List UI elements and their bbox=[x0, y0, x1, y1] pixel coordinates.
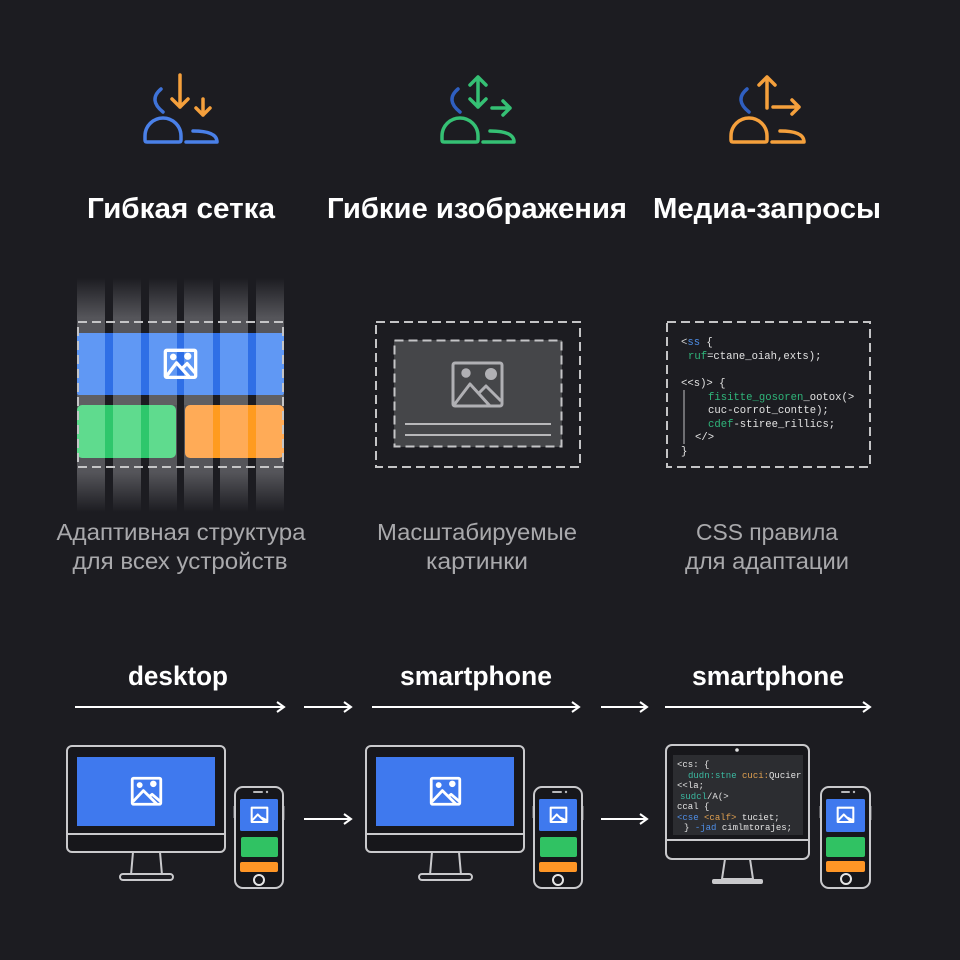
icon: image bbox=[165, 350, 196, 377]
panel: css code: cdef-stiree_rillics; bbox=[708, 419, 835, 431]
code: dudn:stne cuci:Qucier bbox=[688, 771, 801, 781]
icon: image bbox=[838, 808, 853, 822]
code: <<la; bbox=[677, 781, 704, 791]
code bbox=[677, 760, 801, 833]
heading: flexible images: Гибкие изображения bbox=[327, 193, 627, 225]
device: phone 2 bbox=[532, 787, 584, 888]
label: smartphone: smartphone bbox=[400, 661, 552, 691]
label: smartphone: smartphone bbox=[692, 661, 844, 691]
icon: image bbox=[132, 778, 161, 804]
device: monitor 3 with code bbox=[666, 745, 809, 884]
code: <cse <calf> tuciet; bbox=[677, 813, 780, 823]
icon: image bbox=[431, 778, 460, 804]
text lines bbox=[405, 424, 551, 435]
panel: css code: ruf=ctane_oiah,exts); bbox=[688, 351, 822, 363]
code: sudcl/A(> bbox=[680, 792, 729, 802]
panel: css code bbox=[667, 322, 870, 467]
icon: flexible grid bbox=[145, 75, 217, 142]
heading: flexible grid: Гибкая сетка bbox=[87, 193, 276, 225]
icon: media queries bbox=[731, 77, 804, 142]
device: phone 3 bbox=[820, 787, 872, 888]
orange layout block bbox=[185, 405, 284, 458]
arrow: between devices 1 bbox=[304, 814, 351, 824]
code: } -jad cimlmtorajes; bbox=[684, 823, 792, 833]
caption: grid: Адаптивная структура bbox=[56, 519, 306, 545]
caption: images: картинки bbox=[426, 548, 528, 574]
panel: grid diagram bbox=[77, 278, 284, 512]
icon: flexible images bbox=[442, 77, 514, 142]
panel: css code: } bbox=[681, 446, 687, 458]
caption: css: CSS правила bbox=[696, 519, 838, 545]
panel: css code: fisitte_gosoren_ootox(> bbox=[708, 392, 854, 404]
device: monitor 1 bbox=[67, 746, 225, 880]
icon: image bbox=[252, 808, 267, 822]
caption: grid: для всех устройств bbox=[72, 548, 288, 574]
caption: images: Масштабируемые bbox=[377, 519, 577, 545]
heading: media queries: Медиа-запросы bbox=[653, 193, 881, 225]
arrows: top row bbox=[75, 702, 870, 712]
label: desktop: desktop bbox=[128, 661, 228, 691]
panel: css code: </> bbox=[695, 432, 714, 444]
device: phone 1 bbox=[234, 787, 284, 888]
blue layout block bbox=[77, 333, 284, 395]
code: <cs: { bbox=[677, 760, 709, 770]
panel: css code: <<s)> { bbox=[681, 378, 726, 390]
panel: css code: <ss { bbox=[681, 337, 713, 349]
panel: scalable image diagram bbox=[376, 322, 580, 467]
code: ccal { bbox=[677, 802, 709, 812]
icon: image bbox=[453, 363, 502, 406]
arrow: between devices 2 bbox=[601, 814, 647, 824]
green layout block bbox=[77, 405, 176, 458]
panel: css code: cuc-corrot_contte); bbox=[708, 405, 829, 417]
caption: css: для адаптации bbox=[685, 548, 849, 574]
device: monitor 2 bbox=[366, 746, 524, 880]
grid dashed frame bbox=[78, 322, 283, 467]
icon: image bbox=[551, 808, 566, 822]
